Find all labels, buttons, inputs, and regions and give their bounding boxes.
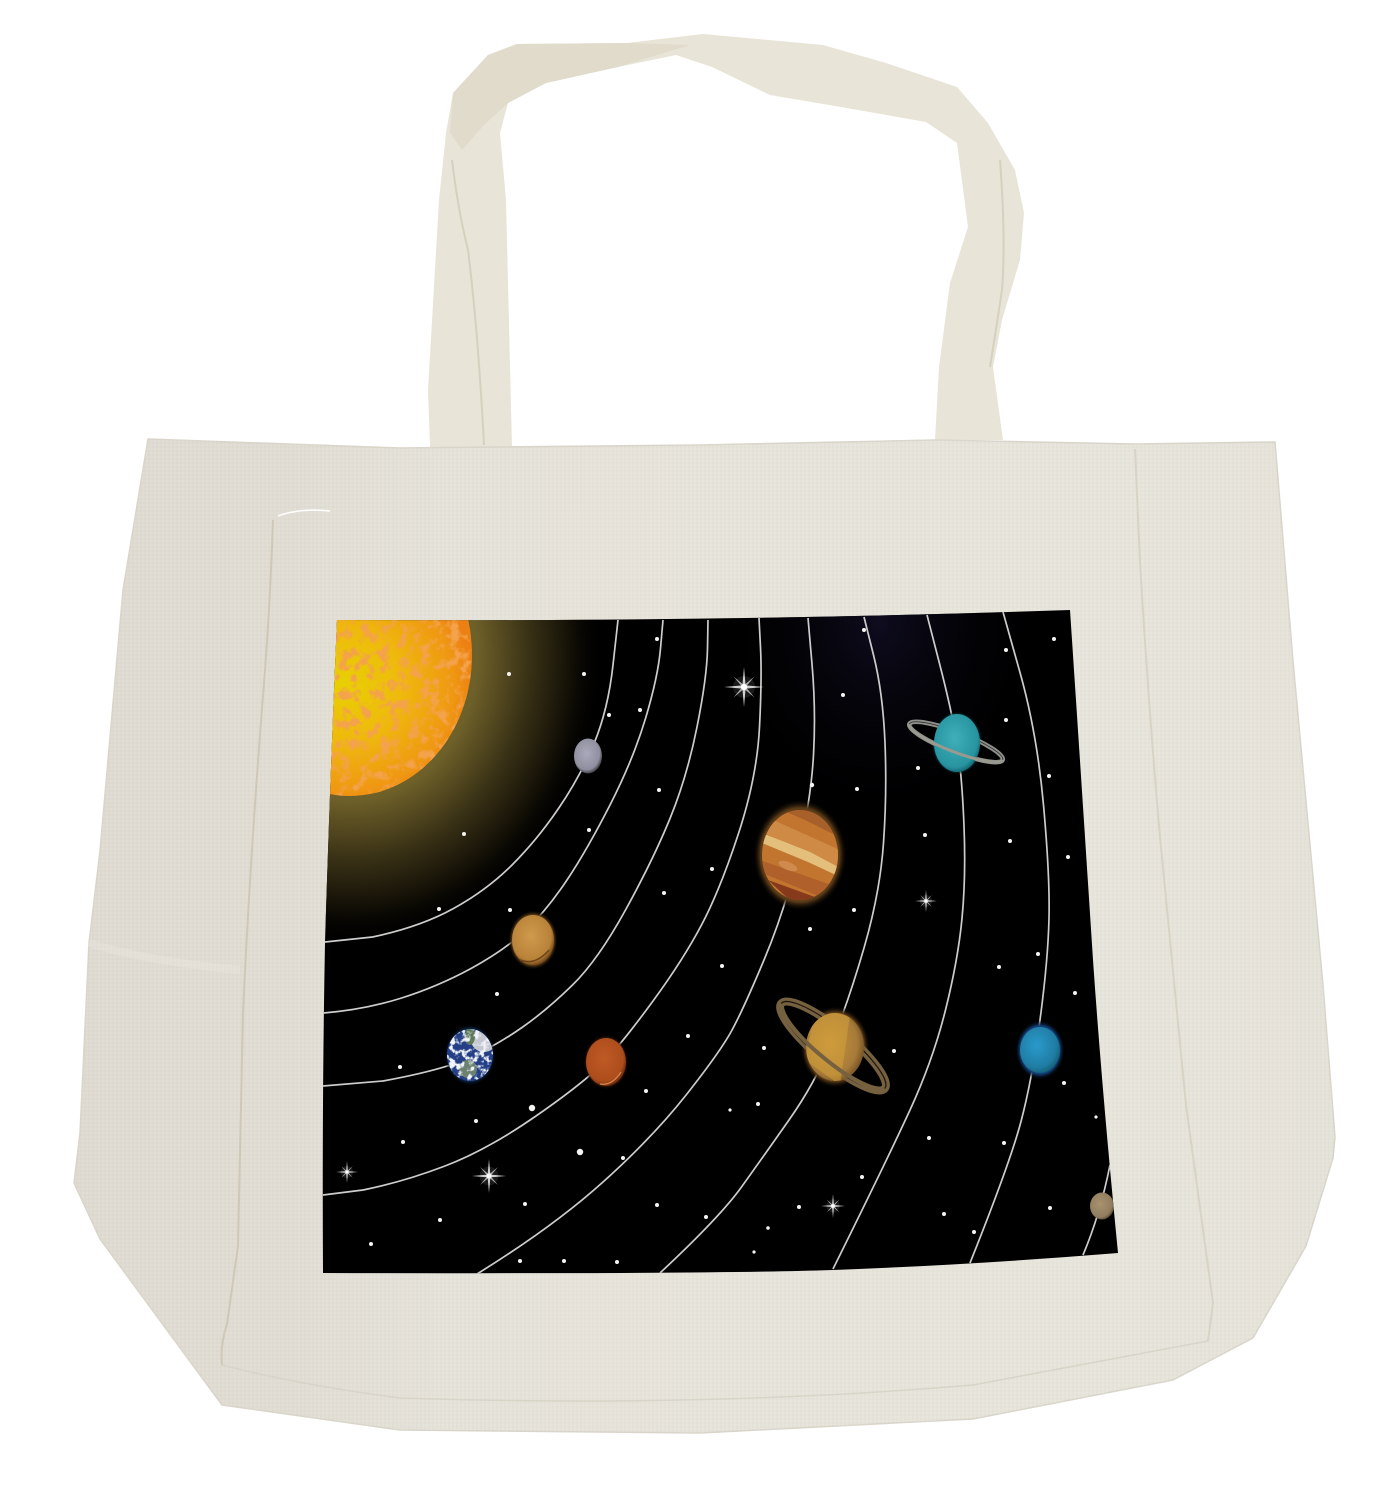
planet: Jupiter: [753, 799, 847, 911]
planet: Venus: [508, 910, 558, 970]
left crease highlight: [89, 943, 240, 970]
planet: Uranus with ring: [906, 711, 1006, 775]
planet: Saturn with ring: [776, 998, 890, 1094]
planet: Mars: [584, 1036, 628, 1088]
planet: Pluto: [1090, 1192, 1114, 1220]
background stars: [369, 628, 1098, 1264]
planet: Mercury: [574, 738, 602, 774]
seam stitch highlight: [278, 510, 330, 516]
orbit lines: [323, 612, 1110, 1274]
bag handle: [428, 34, 1024, 447]
right seam fold: [1135, 449, 1213, 1341]
left seam fold: [222, 520, 273, 1365]
printed panel: solar system: [322, 610, 1118, 1274]
sparkle stars: [335, 666, 938, 1219]
bottom hem: [222, 1341, 1208, 1401]
bag body: [74, 439, 1335, 1433]
sun: [330, 620, 472, 796]
planet: Neptune: [1015, 1020, 1065, 1080]
planet: Earth: [446, 1026, 494, 1084]
